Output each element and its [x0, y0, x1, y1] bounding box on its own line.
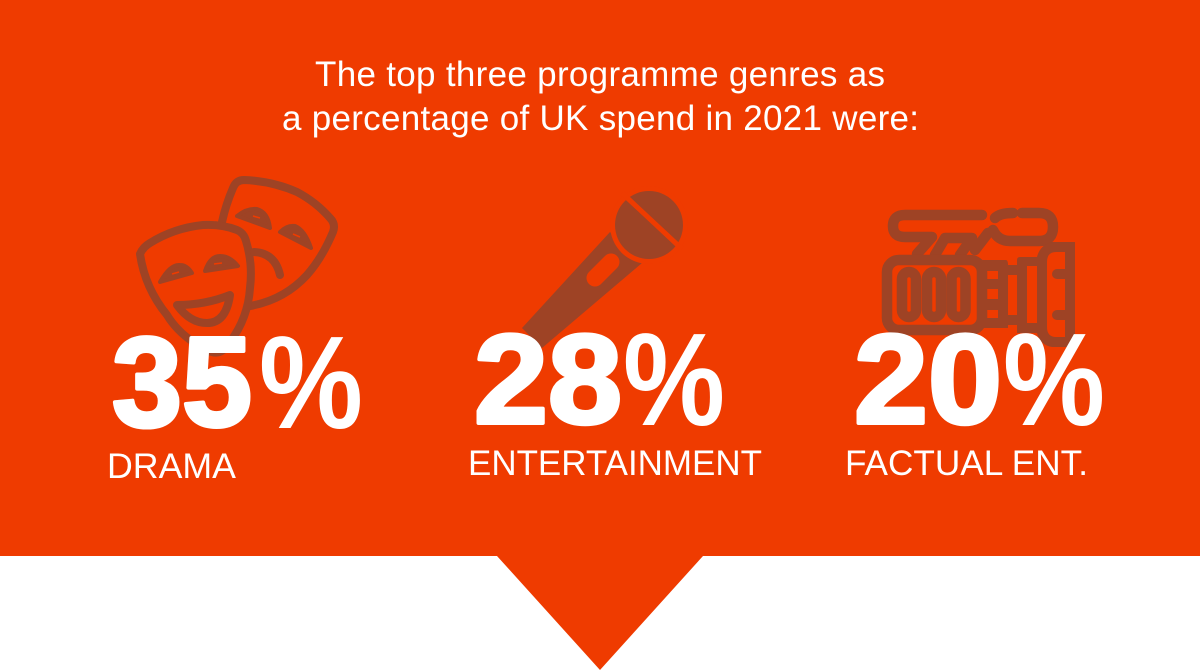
stat: 28% entertainment: 28 [474, 308, 622, 450]
icon: microphone [522, 186, 688, 348]
stat: 28% entertainment [468, 306, 762, 483]
stat: 35% drama: DRAMA [107, 447, 237, 486]
icon: theatre masks [140, 180, 334, 353]
stat: 28% entertainment: ENTERTAINMENT [468, 444, 762, 483]
stat: 20% factual entertainment: FACTUAL ENT. [845, 444, 1088, 483]
stat: 28% entertainment: % [623, 306, 725, 453]
stat: 35% drama: 35 [112, 311, 252, 453]
icon: video camera [887, 213, 1075, 347]
heading: The top three programme genres as [315, 55, 885, 94]
heading [282, 55, 919, 138]
stat: 20% factual entertainment: 20 [854, 308, 1002, 450]
stat: 35% drama [107, 309, 363, 486]
stat: 35% drama: % [259, 309, 363, 456]
stat: 20% factual entertainment: % [1003, 306, 1105, 453]
heading: a percentage of UK spend in 2021 were: [282, 99, 919, 138]
stat: 20% factual entertainment [845, 306, 1105, 483]
